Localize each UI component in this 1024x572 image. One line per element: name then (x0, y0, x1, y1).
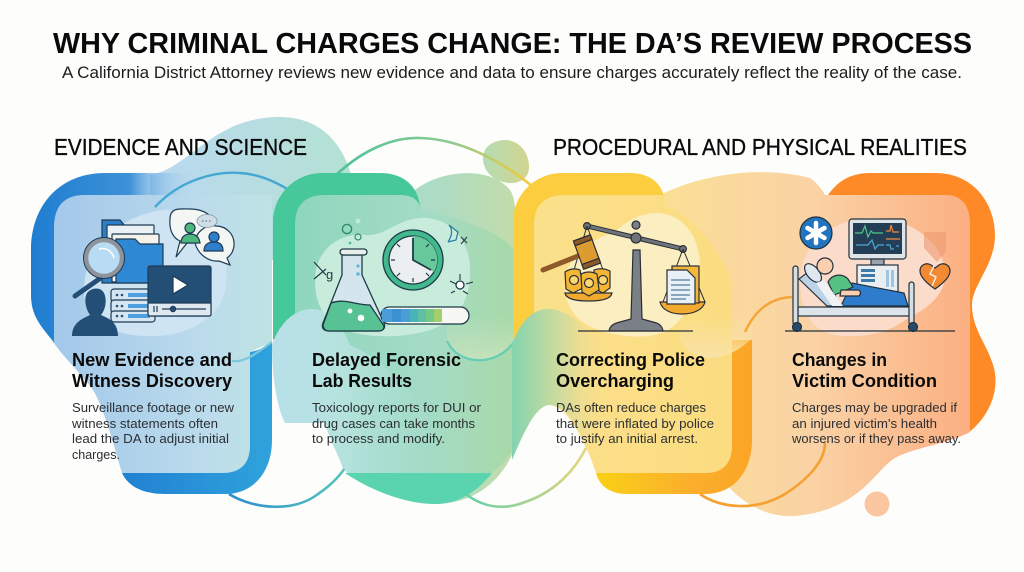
text: victim condition: an injured victim's health (792, 416, 937, 431)
text: delayed forensic: Toxicology reports for DUI or (312, 400, 482, 415)
heading: delayed forensic: Delayed Forensic (312, 350, 461, 370)
panel band: yellow bottom and right (596, 340, 752, 494)
title: WHY CRIMINAL CHARGES CHANGE: THE DA’S REVIEW PROCESS (53, 28, 972, 60)
text: correcting overcharging: DAs often reduce charges (556, 400, 706, 415)
panel blob: mint (325, 173, 516, 504)
text: correcting overcharging: to justify an initial arrest. (556, 431, 698, 446)
panel band: green top (273, 173, 420, 340)
connector arc: green to yellow bottom (467, 448, 586, 507)
text: delayed forensic: to process and modify. (312, 431, 445, 446)
panel band: orange (825, 173, 996, 433)
decorative circle: peach (864, 492, 890, 516)
panel: peach blob (660, 172, 970, 516)
text: victim condition: worsens or if they pass away. (791, 431, 961, 446)
panel blob: pale blue left (272, 309, 430, 473)
text: new evidence: lead the DA to adjust initial (72, 431, 229, 446)
icon: scales of justice (543, 213, 705, 337)
panel: victim condition (785, 217, 961, 446)
text: victim condition: Charges may be upgraded if (792, 400, 957, 415)
panel inner card: green (295, 195, 514, 473)
panel band: yellow top (513, 173, 665, 345)
icon: flask clock and molecules (314, 218, 473, 336)
icon: hospital bed and monitor (785, 217, 955, 336)
subtitle: A California District Attorney reviews new evidence and data to ensure charges accurately reflect the reality of the case. (62, 63, 962, 82)
panel: correcting overcharging (512, 173, 825, 506)
heading: correcting overcharging: Correcting Police (556, 350, 705, 370)
panel blob: mint to yellow left (512, 309, 605, 460)
section heading: procedural and physical realities: PROCEDURAL AND PHYSICAL REALITIES (553, 134, 967, 160)
text: new evidence: charges. (72, 447, 120, 462)
decorative blob behind section heading (150, 117, 352, 260)
text: new evidence: Surveillance footage or new (72, 400, 235, 415)
text: new evidence: witness statements often (71, 416, 218, 431)
heading: new evidence: Witness Discovery (72, 371, 232, 391)
panel background: blue (31, 173, 200, 343)
icon: flask clock and molecules: g (326, 267, 333, 282)
text: correcting overcharging: that were inflated by police (556, 416, 714, 431)
decorative circle: olive (483, 140, 529, 183)
heading: delayed forensic: Lab Results (312, 371, 412, 391)
text: delayed forensic: drug cases can take months (312, 416, 475, 431)
heading: new evidence: New Evidence and (72, 350, 232, 370)
icon: evidence collage (72, 209, 234, 336)
connector arc: orange (700, 443, 825, 506)
heading: victim condition: Victim Condition (792, 371, 937, 391)
panel inner card: blue (54, 195, 272, 473)
connector arc: green to yellow (336, 138, 532, 186)
panel inner card: yellow (534, 195, 732, 473)
panel: delayed forensic (272, 173, 516, 504)
panel band: green bottom (345, 473, 492, 504)
panel band: blue (122, 342, 272, 494)
heading: correcting overcharging: Overcharging (556, 371, 674, 391)
section heading: evidence and science: EVIDENCE AND SCIENCE (54, 134, 307, 160)
connector arc: orange top (745, 297, 792, 332)
teal arc under pale blob (232, 342, 272, 361)
connector arc: blue top (155, 173, 292, 207)
heading: victim condition: Changes in (792, 350, 887, 370)
pale blob right (680, 315, 752, 358)
connector arc: blue to green bottom (229, 468, 345, 507)
panel: new evidence (31, 173, 292, 494)
pale blob and teal arc (447, 315, 514, 360)
